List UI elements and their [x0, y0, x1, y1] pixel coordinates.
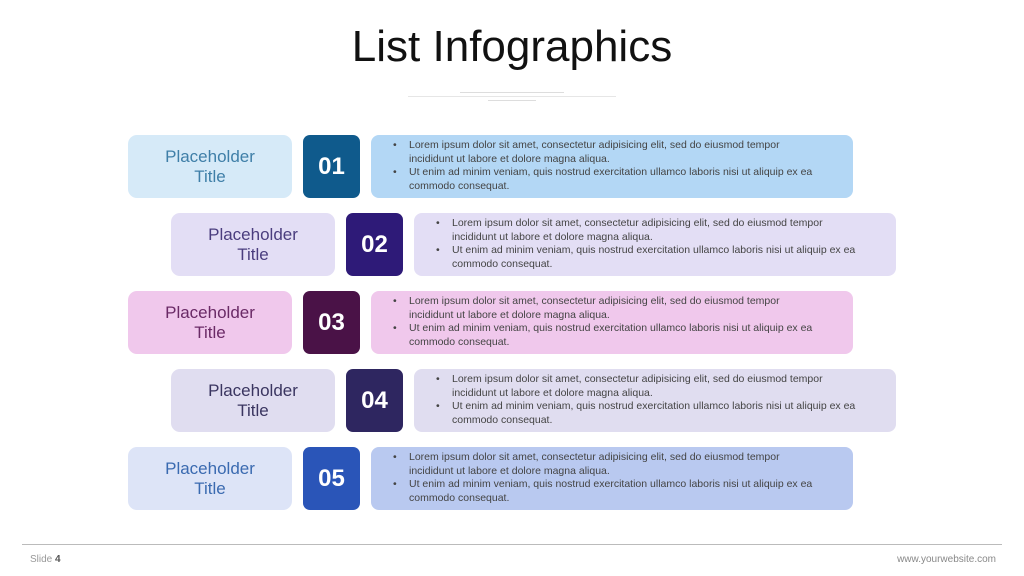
row1 number: [303, 135, 360, 198]
row5 text: incididunt ut labore et dolore magna aliqua.: [409, 464, 610, 476]
row4 text: commodo consequat.: [452, 414, 552, 426]
row1 title box: Placeholder: [165, 146, 255, 166]
row2 number: 02: [361, 230, 388, 258]
row4 number: 04: [361, 386, 388, 414]
row2 title box: Placeholder: [208, 224, 298, 244]
title underline: [408, 92, 616, 101]
row 4: [171, 369, 896, 432]
row 3: [128, 291, 853, 354]
row1 text: Ut enim ad minim veniam, quis nostrud exercitation ullamco laboris nisi ut aliquip ex ea: [409, 166, 812, 178]
row1 text: [371, 135, 853, 198]
row4 title box: Title: [237, 400, 269, 420]
row 2: [171, 213, 896, 276]
row5 title box: Title: [194, 478, 226, 498]
row4 title box: Placeholder: [208, 380, 298, 400]
row 1: [128, 135, 853, 198]
row3 text: [371, 291, 853, 354]
row2 number: [346, 213, 403, 276]
row4 number: [346, 369, 403, 432]
row5 text: Ut enim ad minim veniam, quis nostrud exercitation ullamco laboris nisi ut aliquip ex ea: [409, 478, 812, 490]
row1 number: 01: [318, 152, 345, 180]
row2 text: Ut enim ad minim veniam, quis nostrud exercitation ullamco laboris nisi ut aliquip ex ea: [452, 244, 855, 256]
row3 number: 03: [318, 308, 345, 336]
row4 text: Ut enim ad minim veniam, quis nostrud exercitation ullamco laboris nisi ut aliquip ex ea: [452, 400, 855, 412]
row5 title box: [128, 447, 292, 510]
row1 title box: Title: [194, 166, 226, 186]
row3 title box: [128, 291, 292, 354]
title: List Infographics: [352, 22, 672, 71]
row2 title box: [171, 213, 335, 276]
row2 text: commodo consequat.: [452, 258, 552, 270]
row2 text: incididunt ut labore et dolore magna aliqua.: [452, 230, 653, 242]
row5 number: [303, 447, 360, 510]
row4 text: incididunt ut labore et dolore magna aliqua.: [452, 386, 653, 398]
row3 text: incididunt ut labore et dolore magna aliqua.: [409, 308, 610, 320]
row5 text: Lorem ipsum dolor sit amet, consectetur adipisicing elit, sed do eiusmod tempor: [409, 451, 780, 463]
row1 text: Lorem ipsum dolor sit amet, consectetur adipisicing elit, sed do eiusmod tempor: [409, 139, 780, 151]
footer slide number: Slide 4: [30, 554, 61, 565]
row4 text: [414, 369, 896, 432]
row4 title box: [171, 369, 335, 432]
row2 title box: Title: [237, 244, 269, 264]
row3 text: Lorem ipsum dolor sit amet, consectetur adipisicing elit, sed do eiusmod tempor: [409, 295, 780, 307]
footer website: www.yourwebsite.com: [897, 554, 996, 565]
row3 number: [303, 291, 360, 354]
row5 text: commodo consequat.: [409, 492, 509, 504]
row5 title box: Placeholder: [165, 458, 255, 478]
row3 text: Ut enim ad minim veniam, quis nostrud exercitation ullamco laboris nisi ut aliquip ex ea: [409, 322, 812, 334]
row1 text: incididunt ut labore et dolore magna aliqua.: [409, 152, 610, 164]
row4 text: Lorem ipsum dolor sit amet, consectetur adipisicing elit, sed do eiusmod tempor: [452, 373, 823, 385]
row1 title box: [128, 135, 292, 198]
row5 text: [371, 447, 853, 510]
row3 title box: Placeholder: [165, 302, 255, 322]
row 5: [128, 447, 853, 510]
row2 text: Lorem ipsum dolor sit amet, consectetur adipisicing elit, sed do eiusmod tempor: [452, 217, 823, 229]
row2 text: [414, 213, 896, 276]
row3 text: commodo consequat.: [409, 336, 509, 348]
row1 text: commodo consequat.: [409, 180, 509, 192]
row5 number: 05: [318, 464, 345, 492]
row3 title box: Title: [194, 322, 226, 342]
